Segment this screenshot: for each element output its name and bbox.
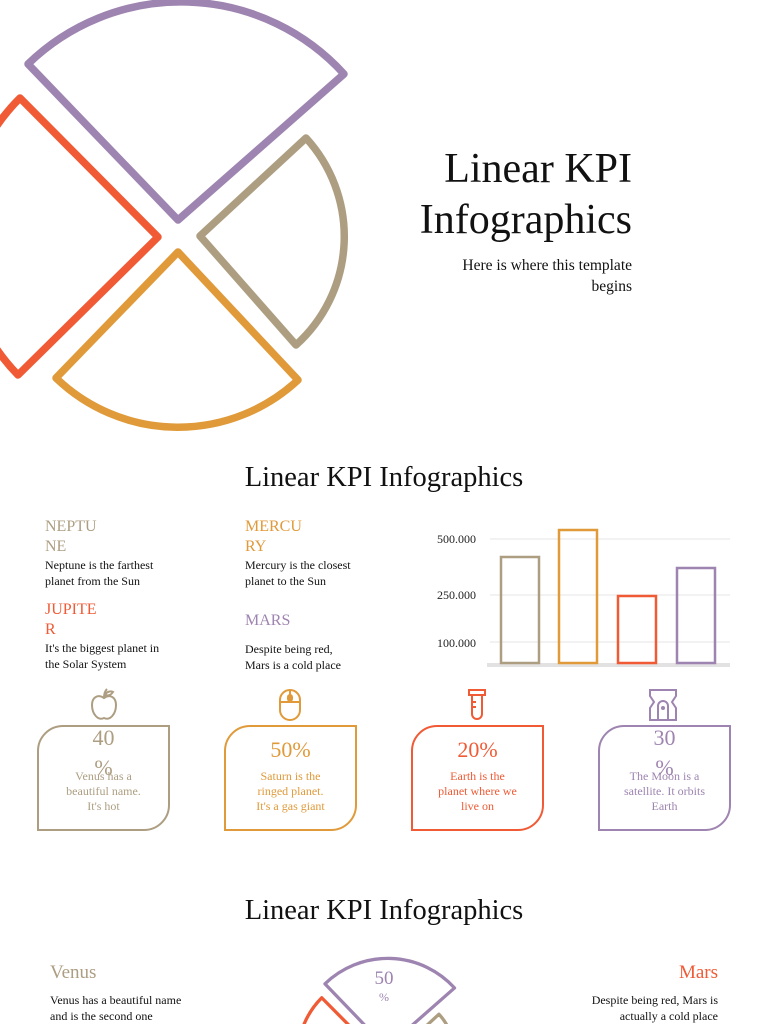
icon: mouse [279, 689, 301, 721]
text: neptune [45, 518, 154, 588]
card 50%: 50% [270, 737, 311, 762]
card 40% [37, 725, 170, 831]
text: venus: Venus [50, 962, 96, 983]
text: neptune: NEPTU [45, 518, 97, 535]
text: mercury: planet to the Sun [245, 574, 326, 588]
text: mercury: MERCU [245, 518, 302, 535]
card 30%: % [655, 755, 674, 780]
text: mars: MARS [245, 612, 290, 629]
hero title: Linear KPI [444, 146, 632, 192]
text: neptune: Neptune is the farthest [45, 558, 153, 572]
text: mars [245, 612, 341, 672]
bottom chart label 50%: 50 [374, 968, 394, 989]
hero sectors group [0, 2, 344, 427]
hero title [420, 146, 632, 243]
bar chart: 250.000 [437, 588, 476, 602]
section title 2: Linear KPI Infographics [245, 895, 523, 926]
text: mars: Despite being red, [245, 642, 333, 656]
card 50%: ringed planet. [258, 784, 323, 798]
text: jupiter: the Solar System [45, 657, 126, 671]
text: venus: Venus has a beautiful name [50, 993, 181, 1007]
card 30%: satellite. It orbits [624, 784, 705, 798]
text: mars right: Mars [679, 962, 718, 983]
hero subtitle [462, 257, 632, 295]
card 40%: % [94, 755, 113, 780]
text: neptune: planet from the Sun [45, 574, 140, 588]
text: jupiter [45, 601, 159, 671]
card 20% [411, 725, 544, 831]
text: mars right: Despite being red, Mars is [592, 993, 718, 1007]
bar chart: 500.000 [437, 532, 476, 546]
text: mars right [592, 962, 718, 1023]
text: venus [50, 962, 181, 1023]
icon: apple [91, 688, 117, 720]
card 30% [598, 725, 731, 831]
card 50% [224, 725, 357, 831]
card 50%: Saturn is the [260, 769, 320, 783]
card 20%: planet where we [438, 784, 517, 798]
card 20%: live on [461, 799, 494, 813]
text: mars right: actually a cold place [620, 1009, 718, 1023]
bottom chart label 50% [374, 968, 394, 1004]
card 20%: 20% [457, 737, 498, 762]
text: mercury [245, 518, 351, 588]
card 50%: It's a gas giant [256, 799, 325, 813]
text: venus: and is the second one [50, 1009, 153, 1023]
hero title: Infographics [420, 197, 632, 243]
card 20%: Earth is the [450, 769, 505, 783]
card 30%: The Moon is a [630, 769, 699, 783]
text: mercury: RY [245, 538, 266, 555]
bar chart [437, 528, 730, 667]
text: mercury: Mercury is the closest [245, 558, 351, 572]
card 40%: Venus has a [75, 769, 132, 783]
card 40%: beautiful name. [66, 784, 141, 798]
card 30%: Earth [652, 799, 678, 813]
bottom chart label 50%: % [379, 990, 389, 1004]
hero subtitle: Here is where this template [462, 257, 632, 274]
text: mars: Mars is a cold place [245, 658, 341, 672]
hero subtitle: begins [592, 278, 632, 295]
icon: sharpener [649, 689, 677, 721]
section title 1: Linear KPI Infographics [245, 462, 523, 493]
text: neptune: NE [45, 538, 66, 555]
bottom sectors graphic [298, 958, 455, 1024]
card 40%: It's hot [87, 799, 120, 813]
card 30%: 30 [654, 725, 676, 750]
text: jupiter: JUPITE [45, 601, 97, 618]
text: jupiter: It's the biggest planet in [45, 641, 159, 655]
bar chart: 100.000 [437, 636, 476, 650]
text: jupiter: R [45, 621, 56, 638]
icon: test tube [468, 689, 486, 720]
card 40%: 40 [92, 725, 114, 750]
